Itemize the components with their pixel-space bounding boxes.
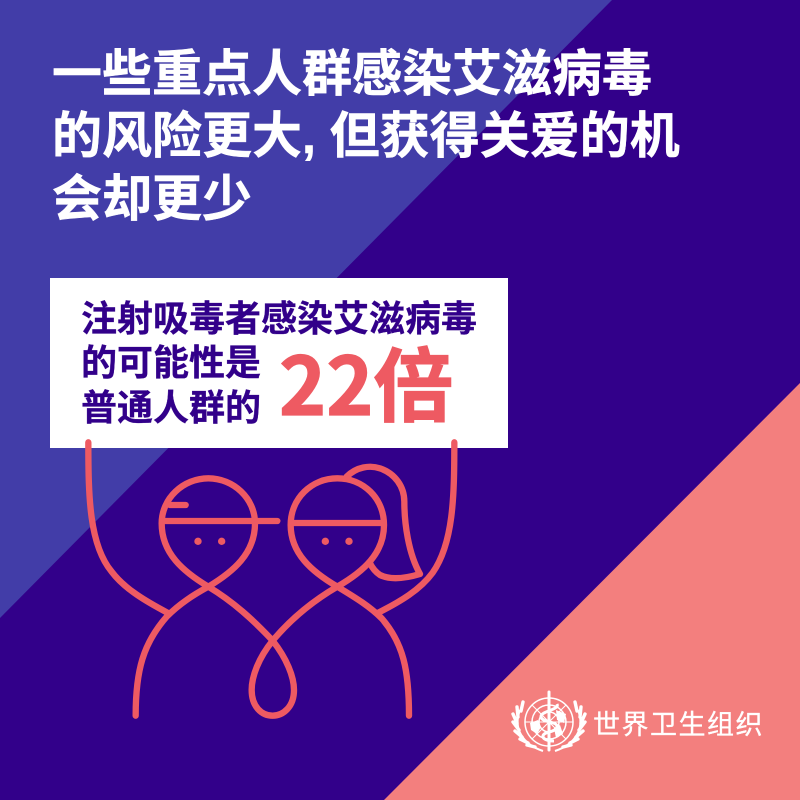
serpent (541, 704, 557, 741)
title: 会却更少 (52, 171, 252, 227)
title: 一些重点人群感染艾滋病毒 (52, 46, 652, 102)
girl hairline (294, 514, 381, 532)
cap detail (170, 496, 186, 514)
organization name: 世界卫生组织 (593, 710, 764, 740)
illustration: two figures holding the sign (85, 439, 458, 719)
wreath stems (518, 710, 580, 751)
globe rings (525, 698, 573, 746)
sign text (81, 298, 477, 428)
continents (530, 710, 566, 738)
title: 的风险更大, 但获得关爱的机 (52, 108, 680, 164)
statistic: 22 times: 22倍 (279, 323, 453, 439)
panel: white sign (50, 278, 508, 448)
wreath leaves (513, 702, 585, 747)
linked figures outline (136, 478, 409, 716)
ponytail (347, 467, 420, 578)
cap brim (165, 512, 277, 530)
staff (548, 692, 550, 750)
left arm (88, 442, 167, 613)
sign text: 的可能性是 (81, 342, 261, 383)
sign text: 普通人群的 (81, 387, 261, 428)
eyes (194, 538, 353, 545)
title (52, 46, 680, 227)
right arm (378, 442, 454, 613)
icon: WHO emblem (511, 690, 587, 752)
sign text: 注射吸毒者感染艾滋病毒 (81, 298, 477, 339)
